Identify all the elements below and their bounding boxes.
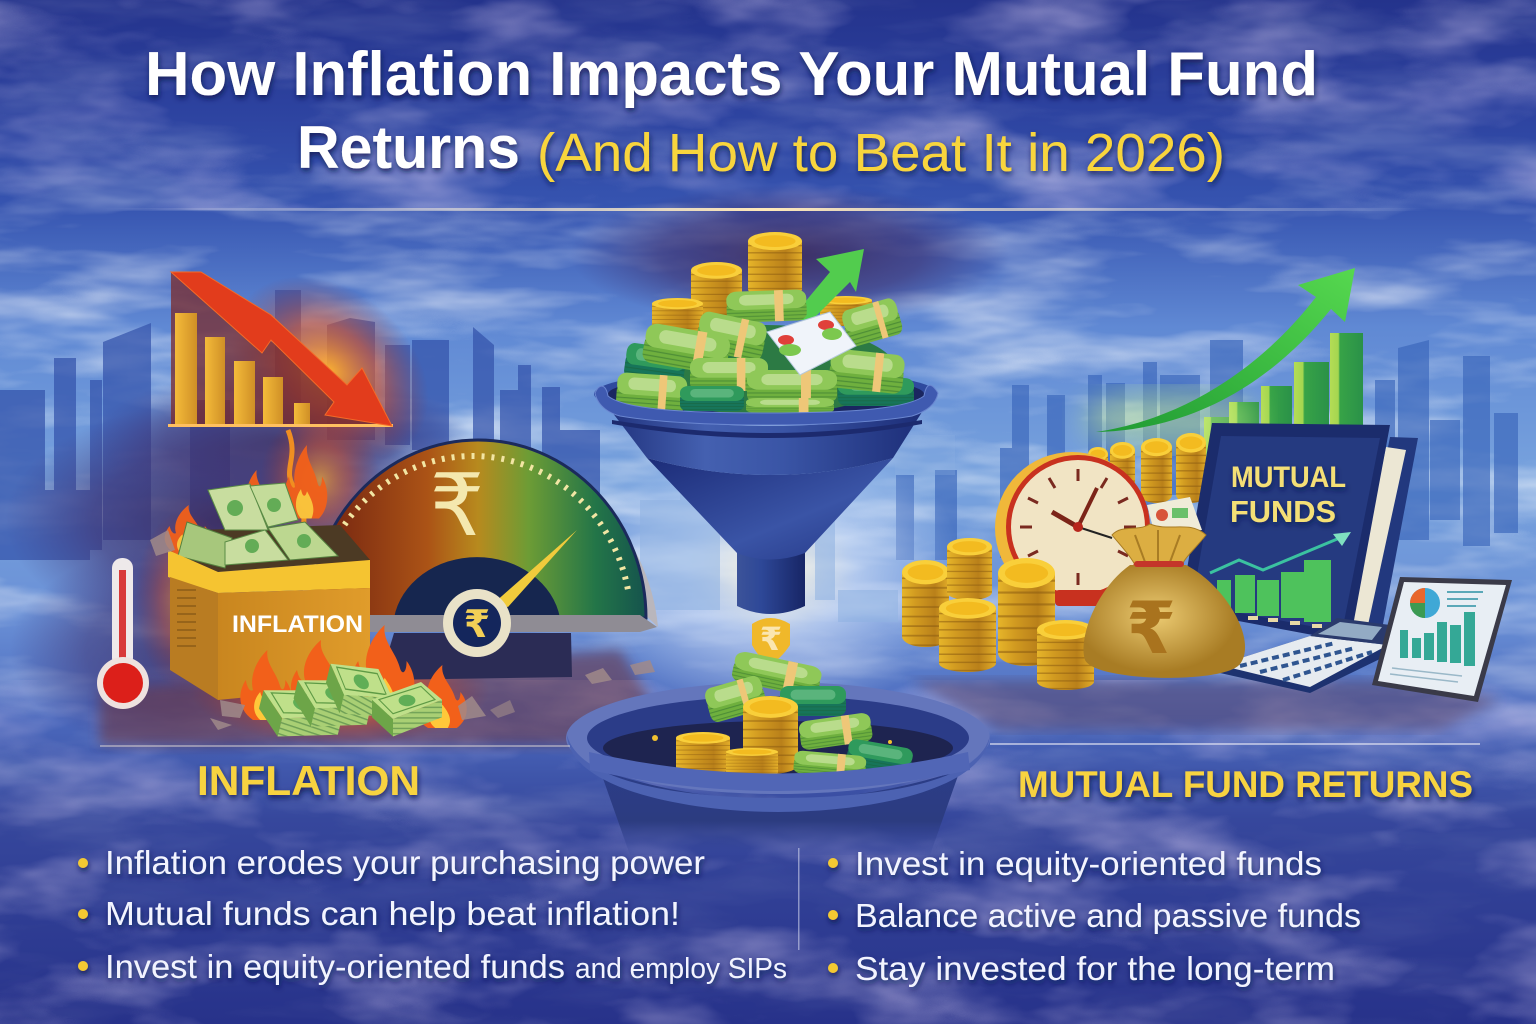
bullets left: Invest in equity-oriented funds — [105, 948, 565, 985]
title: How Inflation Impacts Your Mutual Fund — [145, 40, 1318, 109]
title: Returns — [297, 114, 520, 181]
mutual funds growth bars — [1204, 333, 1363, 457]
calculator — [1219, 618, 1390, 693]
bullets right — [828, 845, 1361, 987]
flames behind — [165, 430, 327, 554]
funnel — [595, 385, 938, 614]
section rules — [100, 743, 1480, 747]
bullets right: Stay invested for the long-term — [855, 950, 1335, 987]
money bag — [1083, 524, 1245, 678]
speedometer gauge — [296, 440, 658, 680]
bullets right: Invest in equity-oriented funds — [855, 845, 1322, 882]
inflation box with cash — [168, 483, 370, 700]
heading: mutual fund returns: MUTUAL FUND RETURNS — [1018, 764, 1473, 805]
bullets left: Mutual funds can help beat inflation! — [105, 895, 680, 932]
mini report card on heap — [767, 312, 856, 375]
title: (And How to Beat It in 2026) — [537, 123, 1225, 183]
clock — [995, 452, 1150, 606]
falling rupee coin: ₹ — [760, 621, 782, 657]
center distant buildings — [640, 435, 955, 622]
thermometer — [97, 558, 149, 709]
report card with chart — [1372, 577, 1512, 702]
mutual funds book: FUNDS — [1230, 494, 1336, 529]
mutual funds book: MUTUAL — [1231, 461, 1346, 494]
funnel back rim — [594, 369, 938, 419]
collecting bowl — [566, 650, 990, 855]
bullets left: Inflation erodes your purchasing power — [105, 844, 705, 881]
speedometer gauge: ₹ — [464, 604, 490, 646]
rubble — [150, 530, 655, 730]
skyline left — [0, 290, 600, 560]
center light glow — [582, 420, 962, 720]
fire glow — [135, 238, 490, 745]
ground right — [910, 680, 1500, 730]
title — [145, 40, 1318, 183]
flames and burning cash — [240, 625, 467, 755]
mutual funds book — [1180, 423, 1418, 644]
falling rupee coin — [752, 618, 790, 664]
speedometer gauge: ₹ — [430, 458, 484, 554]
bullets left — [78, 844, 787, 985]
ground left — [100, 650, 650, 745]
bullets left: and employ SIPs — [575, 953, 787, 985]
bullets right: Balance active and passive funds — [855, 897, 1361, 934]
small card behind bag — [1147, 497, 1202, 535]
green growth arrow — [1080, 268, 1355, 450]
gold coin stacks — [902, 538, 1094, 690]
heading: inflation: INFLATION — [197, 757, 420, 804]
money bag: ₹ — [1126, 589, 1176, 669]
coins behind clock — [1088, 433, 1206, 503]
inflation box with cash: INFLATION — [232, 611, 363, 638]
falling bar chart with red arrow — [168, 272, 393, 427]
skyline right — [896, 340, 1518, 560]
funnel money heap — [615, 232, 914, 415]
smoke clouds — [5, 185, 1010, 760]
